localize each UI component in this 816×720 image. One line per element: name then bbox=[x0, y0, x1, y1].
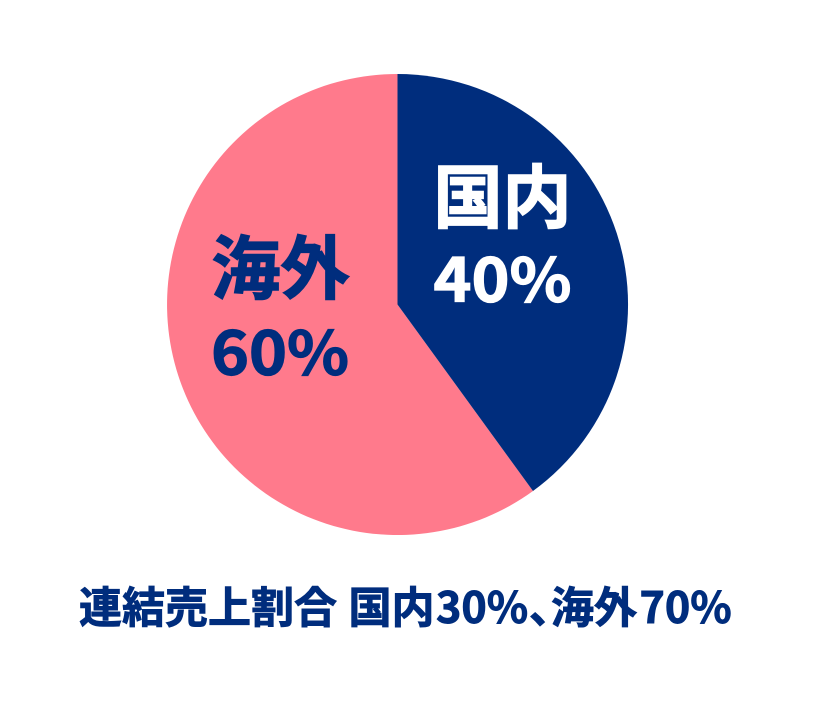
caption: consolidated sales ratio: 、 bbox=[529, 574, 572, 636]
pie slice: overseas 60% bbox=[167, 74, 533, 535]
label: domestic 40%: 国内 bbox=[434, 142, 572, 242]
label: overseas 60%: 海外 bbox=[212, 213, 350, 313]
caption: consolidated sales ratio: 海外 bbox=[551, 574, 637, 636]
caption: consolidated sales ratio: 70% bbox=[640, 574, 732, 636]
label: domestic 40% bbox=[434, 142, 572, 320]
label: overseas 60% bbox=[211, 213, 350, 392]
caption: consolidated sales ratio: 30% bbox=[436, 574, 528, 636]
caption: consolidated sales ratio: 国内 bbox=[348, 574, 434, 636]
label: domestic 40%: 40% bbox=[434, 232, 572, 320]
pie slice: domestic 40% bbox=[398, 74, 628, 491]
label: overseas 60%: 60% bbox=[211, 306, 349, 392]
pie chart bbox=[167, 74, 628, 535]
caption: consolidated sales ratio: 連結売上割合 bbox=[79, 574, 347, 636]
